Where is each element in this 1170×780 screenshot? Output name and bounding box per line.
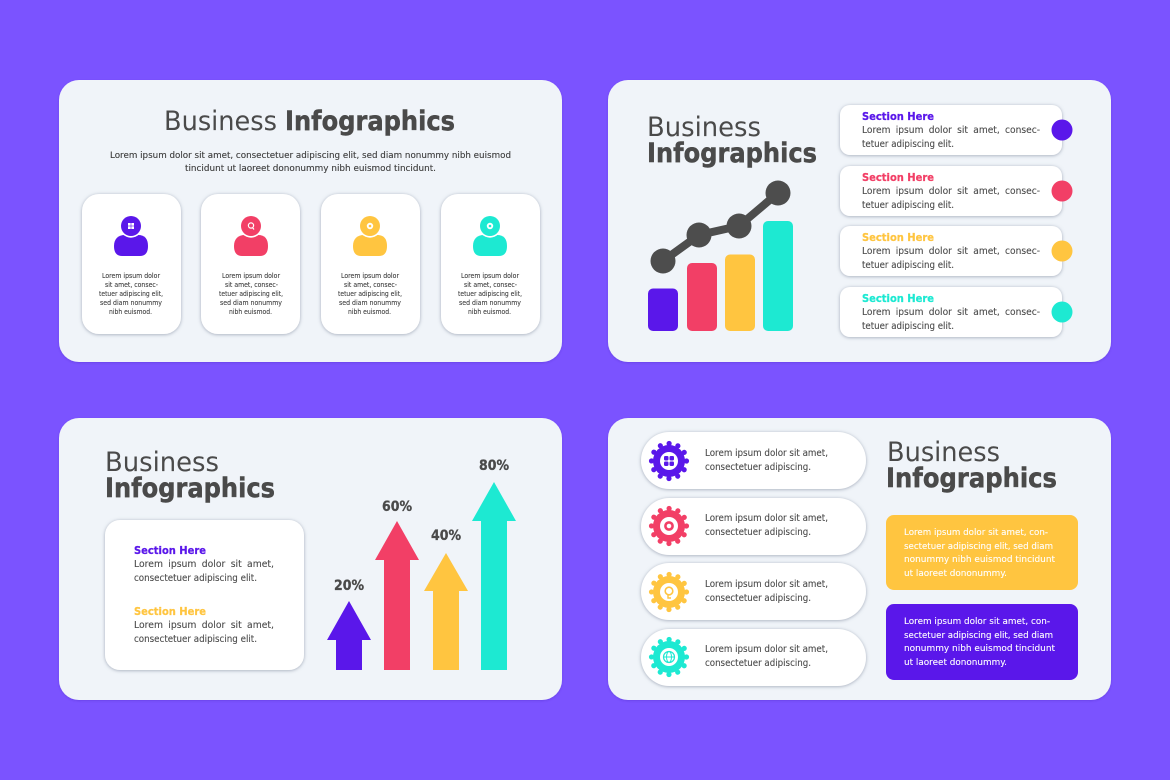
text: card 3: Lorem ipsum dolor	[341, 271, 399, 280]
section row: yellow: tetuer adipiscing elit.	[862, 260, 954, 271]
section row: red	[840, 166, 1072, 216]
section row: purple: Section Here	[862, 111, 934, 123]
pill: teal gear: Lorem ipsum dolor sit amet,	[705, 644, 828, 655]
text: card 4	[458, 271, 522, 316]
card: sections: Lorem ipsum dolor sit amet,	[134, 559, 274, 570]
card: sections: consectetuer adipiscing elit.	[134, 573, 257, 584]
card: red person	[201, 194, 300, 334]
text: card 4: sit amet, consec-	[464, 280, 517, 289]
callout: purple: nonummy nibh euismod tincidunt	[904, 643, 1055, 654]
text: card 2: Lorem ipsum dolor	[222, 271, 280, 280]
pill: teal gear	[641, 629, 866, 686]
section row: purple: Lorem ipsum dolor sit amet, consec-	[862, 125, 1040, 136]
section row: red: Section Here	[862, 172, 934, 184]
callout: purple: Lorem ipsum dolor sit amet, con-	[904, 616, 1050, 627]
card: sections: Section Here	[134, 545, 206, 557]
arrow: 80%	[472, 458, 516, 670]
card: sections: Section Here	[134, 606, 206, 618]
pill: teal gear: consectetuer adipiscing.	[705, 658, 811, 669]
text: card 4: sed diam nonummy	[459, 298, 522, 307]
heading: top-right title: Business	[647, 112, 761, 143]
callout: yellow	[886, 515, 1078, 590]
pill: red gear	[641, 498, 866, 555]
icon: teal person	[473, 214, 507, 256]
bar chart	[648, 221, 793, 331]
text: card 1: tetuer adipiscing elit,	[99, 289, 163, 298]
arrow: 40%: 40%	[431, 528, 461, 544]
text: card 3: nibh euismod.	[348, 307, 391, 316]
section row: red: Lorem ipsum dolor sit amet, consec-	[862, 186, 1040, 197]
arrow: 20%: 20%	[334, 578, 364, 594]
pill: red gear: consectetuer adipiscing.	[705, 527, 811, 538]
pill: purple gear: Lorem ipsum dolor sit amet,	[705, 448, 828, 459]
section row: teal: Lorem ipsum dolor sit amet, consec-	[862, 307, 1040, 318]
card: purple person	[82, 194, 181, 334]
panel: bottom-left arrows	[59, 418, 562, 700]
text: card 2	[219, 271, 283, 316]
heading: bottom-right title: Infographics	[886, 463, 1057, 494]
section row: yellow	[840, 226, 1072, 276]
arrow: 60%	[375, 499, 419, 670]
panel: top-left people cards	[59, 80, 562, 362]
icon: purple person	[114, 214, 148, 256]
heading: bottom-left title	[105, 447, 275, 504]
section row: purple: tetuer adipiscing elit.	[862, 139, 954, 150]
text: card 1: sed diam nonummy	[100, 298, 163, 307]
icon: teal gear	[652, 640, 686, 674]
icon: red person	[234, 214, 268, 256]
arrow: 40%	[424, 528, 468, 670]
icon: purple gear	[652, 444, 686, 478]
arrow: 80%: 80%	[479, 458, 509, 474]
callout: purple: sectetuer adipiscing elit, sed diam	[904, 630, 1053, 641]
panel: bottom-right gears	[608, 418, 1111, 700]
text: card 2: sit amet, consec-	[225, 280, 278, 289]
arrow: 60%: 60%	[382, 499, 412, 515]
section row: red: tetuer adipiscing elit.	[862, 200, 954, 211]
text: card 3: tetuer adipiscing elit,	[338, 289, 402, 298]
pill: yellow gear	[641, 563, 866, 620]
text: card 2: tetuer adipiscing elit,	[219, 289, 283, 298]
card: teal person	[441, 194, 540, 334]
card: sections: Lorem ipsum dolor sit amet,	[134, 620, 274, 631]
section row: purple	[840, 105, 1072, 155]
callout: yellow: sectetuer adipiscing elit, sed diam	[904, 541, 1053, 552]
section row: teal: Section Here	[862, 293, 934, 305]
pill: purple gear	[641, 432, 866, 489]
icon: yellow gear	[652, 574, 686, 610]
text: card 4: Lorem ipsum dolor	[461, 271, 519, 280]
text: card 4: nibh euismod.	[468, 307, 511, 316]
text: card 3: sit amet, consec-	[344, 280, 397, 289]
callout: yellow: Lorem ipsum dolor sit amet, con-	[904, 527, 1048, 538]
line chart	[650, 180, 790, 274]
text block: intro: Lorem ipsum dolor sit amet, consectetuer adipiscing elit, sed diam nonummy nibh euismod	[110, 151, 511, 161]
text: card 1	[99, 271, 163, 316]
section row: teal: tetuer adipiscing elit.	[862, 321, 954, 332]
text: card 1: sit amet, consec-	[105, 280, 158, 289]
text: card 4: tetuer adipiscing elit,	[458, 289, 522, 298]
arrow: 20%	[327, 578, 371, 670]
text block: intro: tincidunt ut laoreet dononummy nibh euismod tincidunt.	[185, 164, 436, 174]
pill: red gear: Lorem ipsum dolor sit amet,	[705, 513, 828, 524]
card: yellow person	[321, 194, 420, 334]
text: card 2: nibh euismod.	[229, 307, 272, 316]
text block: intro	[110, 151, 511, 174]
text: card 3: sed diam nonummy	[339, 298, 402, 307]
callout: purple: ut laoreet dononummy.	[904, 657, 1007, 668]
text: card 2: sed diam nonummy	[220, 298, 283, 307]
card: sections	[105, 520, 304, 670]
heading: top-left title	[164, 106, 455, 137]
icon: yellow person	[353, 214, 387, 256]
heading: top-left title: Infographics	[285, 106, 455, 137]
card: sections: consectetuer adipiscing elit.	[134, 634, 257, 645]
panel: top-right chart and sections	[608, 80, 1111, 362]
text: card 1: Lorem ipsum dolor	[102, 271, 160, 280]
callout: yellow: ut laoreet dononummy.	[904, 568, 1007, 579]
section row: yellow: Section Here	[862, 232, 934, 244]
section row: yellow: Lorem ipsum dolor sit amet, consec-	[862, 246, 1040, 257]
text: card 1: nibh euismod.	[109, 307, 152, 316]
heading: bottom-right title: Business	[887, 437, 1000, 468]
heading: top-right title	[647, 112, 817, 169]
icon: red gear	[652, 508, 686, 544]
heading: bottom-left title: Infographics	[105, 473, 275, 504]
pill: yellow gear: Lorem ipsum dolor sit amet,	[705, 579, 828, 590]
heading: top-right title: Infographics	[647, 138, 817, 169]
callout: purple	[886, 604, 1078, 680]
pill: yellow gear: consectetuer adipiscing.	[705, 593, 811, 604]
pill: purple gear: consectetuer adipiscing.	[705, 462, 811, 473]
section row: teal	[840, 287, 1072, 337]
callout: yellow: nonummy nibh euismod tincidunt	[904, 554, 1055, 565]
text: card 3	[338, 271, 402, 316]
heading: top-left title: Business	[164, 106, 277, 137]
heading: bottom-right title	[886, 437, 1057, 494]
heading: bottom-left title: Business	[105, 447, 219, 478]
